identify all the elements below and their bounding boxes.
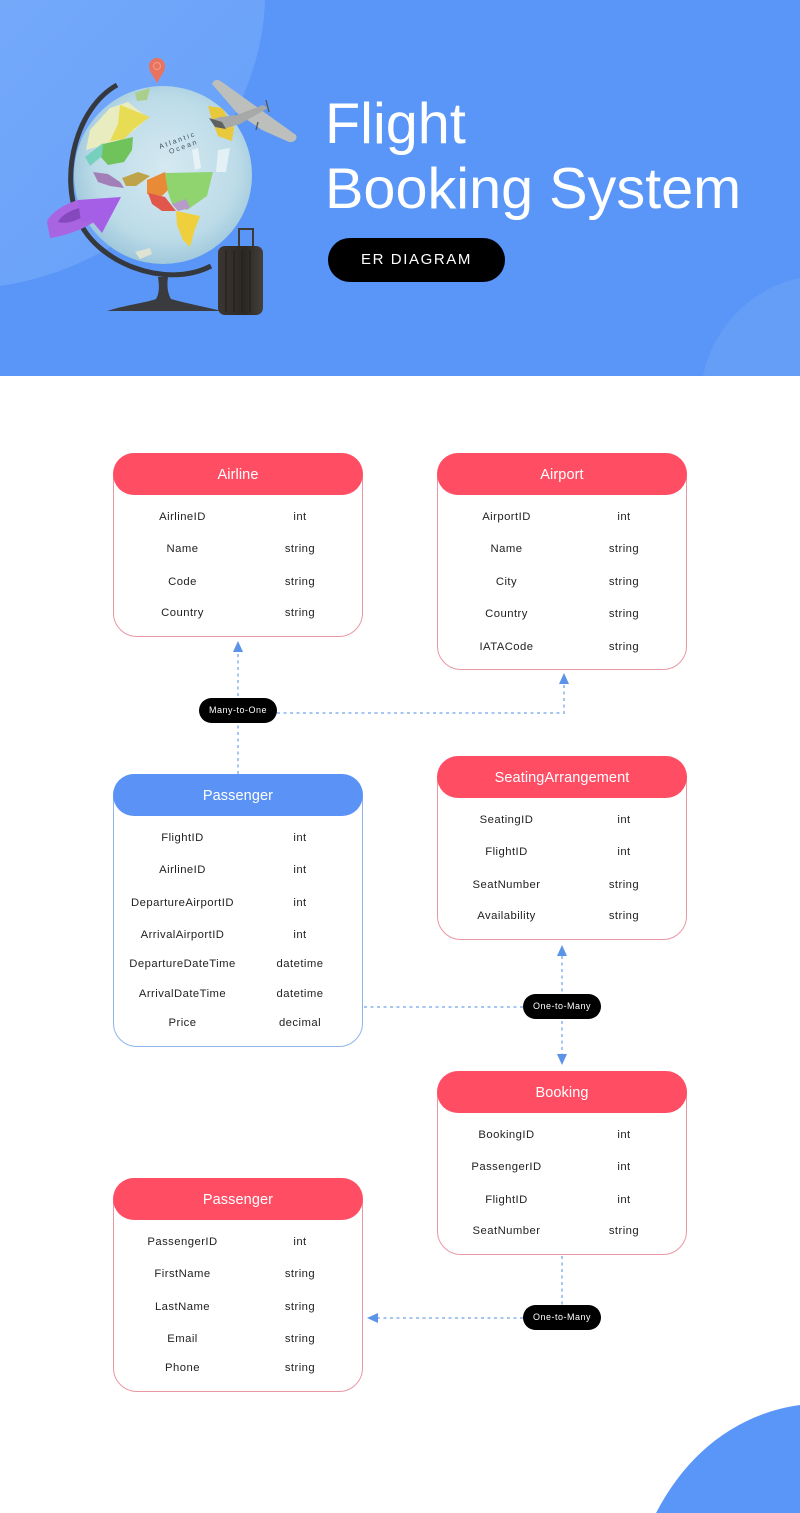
panel: Passenger table (red): int (293, 1236, 307, 1248)
label: many-to-one: Many-to-One (209, 705, 267, 715)
panel: Airport table: int (617, 511, 631, 523)
globe: Atlantic (158, 131, 197, 151)
panel: SeatingArrangement table: int (617, 814, 631, 826)
panel: Passenger flight table (blue) (113, 774, 363, 1047)
panel: Passenger table (red): string (285, 1333, 315, 1345)
label: one-to-many upper: One-to-Many (533, 1001, 591, 1011)
title: Booking System (325, 157, 741, 221)
heading: Booking: Booking (535, 1085, 589, 1101)
illustration: globe with plane, pin, arrow and suitcase (47, 58, 296, 315)
panel: Booking table: int (617, 1194, 631, 1206)
title (325, 92, 741, 221)
heading: Booking (437, 1071, 687, 1113)
icon: location pin (149, 58, 165, 83)
panel: Passenger table (red): FirstName (154, 1268, 211, 1280)
panel: SeatingArrangement table: string (609, 910, 639, 922)
panel: Airline table: Country (161, 607, 204, 619)
panel: Airport table (437, 453, 687, 670)
panel: Booking table: string (609, 1225, 639, 1237)
panel: Airline table (113, 453, 363, 637)
heading: Passenger (red): Passenger (203, 1192, 273, 1208)
panel: Booking table: int (617, 1129, 631, 1141)
panel: Passenger table (red): string (285, 1268, 315, 1280)
panel: Airport table: Country (485, 608, 528, 620)
panel: Airport table: AirportID (482, 511, 531, 523)
panel: SeatingArrangement table: int (617, 846, 631, 858)
panel: Passenger table (red): Email (167, 1333, 198, 1345)
icon: purple arrow (47, 197, 121, 238)
heading: Passenger (blue) (113, 774, 363, 816)
panel: Airline table: AirlineID (159, 511, 206, 523)
panel: Passenger flight table (blue): datetime (277, 988, 323, 1000)
title: Flight (325, 92, 466, 156)
panel: Airline table: Name (167, 543, 198, 555)
label: one-to-many upper (523, 994, 601, 1019)
panel: Passenger flight table (blue): int (293, 897, 307, 909)
panel: Passenger flight table (blue): DepartureAirportID (131, 897, 234, 909)
panel: Passenger table (red): string (285, 1362, 315, 1374)
panel: SeatingArrangement table: SeatNumber (473, 879, 540, 891)
panel: SeatingArrangement table: Availability (477, 910, 536, 922)
panel: Passenger flight table (blue): int (293, 832, 307, 844)
panel: Airport table: Name (491, 543, 522, 555)
panel: Airport table: IATACode (479, 641, 534, 653)
heading: Airline (113, 453, 363, 495)
hero banner (0, 0, 800, 376)
panel: SeatingArrangement table: FlightID (485, 846, 528, 858)
panel: Airport table: string (609, 608, 639, 620)
panel: Passenger table (red): LastName (155, 1301, 210, 1313)
panel: Airport table: string (609, 543, 639, 555)
panel: Airline table: string (285, 543, 315, 555)
panel: Airline table: int (293, 511, 307, 523)
heading: SeatingArrangement: SeatingArrangement (495, 770, 629, 786)
panel: Airline table: string (285, 576, 315, 588)
label: one-to-many lower: One-to-Many (533, 1312, 591, 1322)
panel: Airline table: string (285, 607, 315, 619)
heading: Airport: Airport (540, 467, 584, 483)
heading: SeatingArrangement (437, 756, 687, 798)
panel: Passenger table (red) (113, 1178, 363, 1392)
subtitle pill (328, 238, 505, 282)
panel: Booking table: PassengerID (471, 1161, 542, 1173)
heading: Passenger (blue): Passenger (203, 788, 273, 804)
globe stand (71, 85, 222, 311)
subtitle pill: ER DIAGRAM (361, 251, 472, 268)
hero background shapes (0, 0, 800, 376)
panel: Passenger flight table (blue): Price (168, 1017, 196, 1029)
label: many-to-one (199, 698, 277, 723)
panel: Passenger table (red): PassengerID (147, 1236, 218, 1248)
panel: Passenger flight table (blue): decimal (279, 1017, 321, 1029)
panel: Passenger table (red): Phone (165, 1362, 200, 1374)
panel: Booking table: FlightID (485, 1194, 528, 1206)
heading: Passenger (red) (113, 1178, 363, 1220)
panel: Passenger flight table (blue): int (293, 929, 307, 941)
panel: Booking table: int (617, 1161, 631, 1173)
panel: Airport table: string (609, 641, 639, 653)
panel: Passenger flight table (blue): datetime (277, 958, 323, 970)
panel: Passenger flight table (blue): AirlineID (159, 864, 206, 876)
panel: SeatingArrangement table: string (609, 879, 639, 891)
panel: Passenger flight table (blue): FlightID (161, 832, 204, 844)
icon: airplane (209, 80, 297, 142)
icon: suitcase (218, 229, 263, 315)
heading: Airport (437, 453, 687, 495)
panel: Passenger flight table (blue): DepartureDateTime (129, 958, 236, 970)
panel: Airline table: Code (168, 576, 197, 588)
panel: Passenger table (red): string (285, 1301, 315, 1313)
panel: Booking table: SeatNumber (473, 1225, 540, 1237)
panel: Passenger flight table (blue): ArrivalDateTime (139, 988, 226, 1000)
globe: Ocean (168, 139, 199, 156)
panel: Airport table: City (496, 576, 517, 588)
panel: Booking table: BookingID (478, 1129, 535, 1141)
panel: Airport table: string (609, 576, 639, 588)
panel: Passenger flight table (blue): ArrivalAirportID (141, 929, 224, 941)
label: one-to-many lower (523, 1305, 601, 1330)
globe (74, 86, 252, 264)
heading: Airline: Airline (218, 467, 258, 483)
panel: Booking table (437, 1071, 687, 1255)
panel: Passenger flight table (blue): int (293, 864, 307, 876)
panel: SeatingArrangement table (437, 756, 687, 940)
panel: SeatingArrangement table: SeatingID (480, 814, 533, 826)
